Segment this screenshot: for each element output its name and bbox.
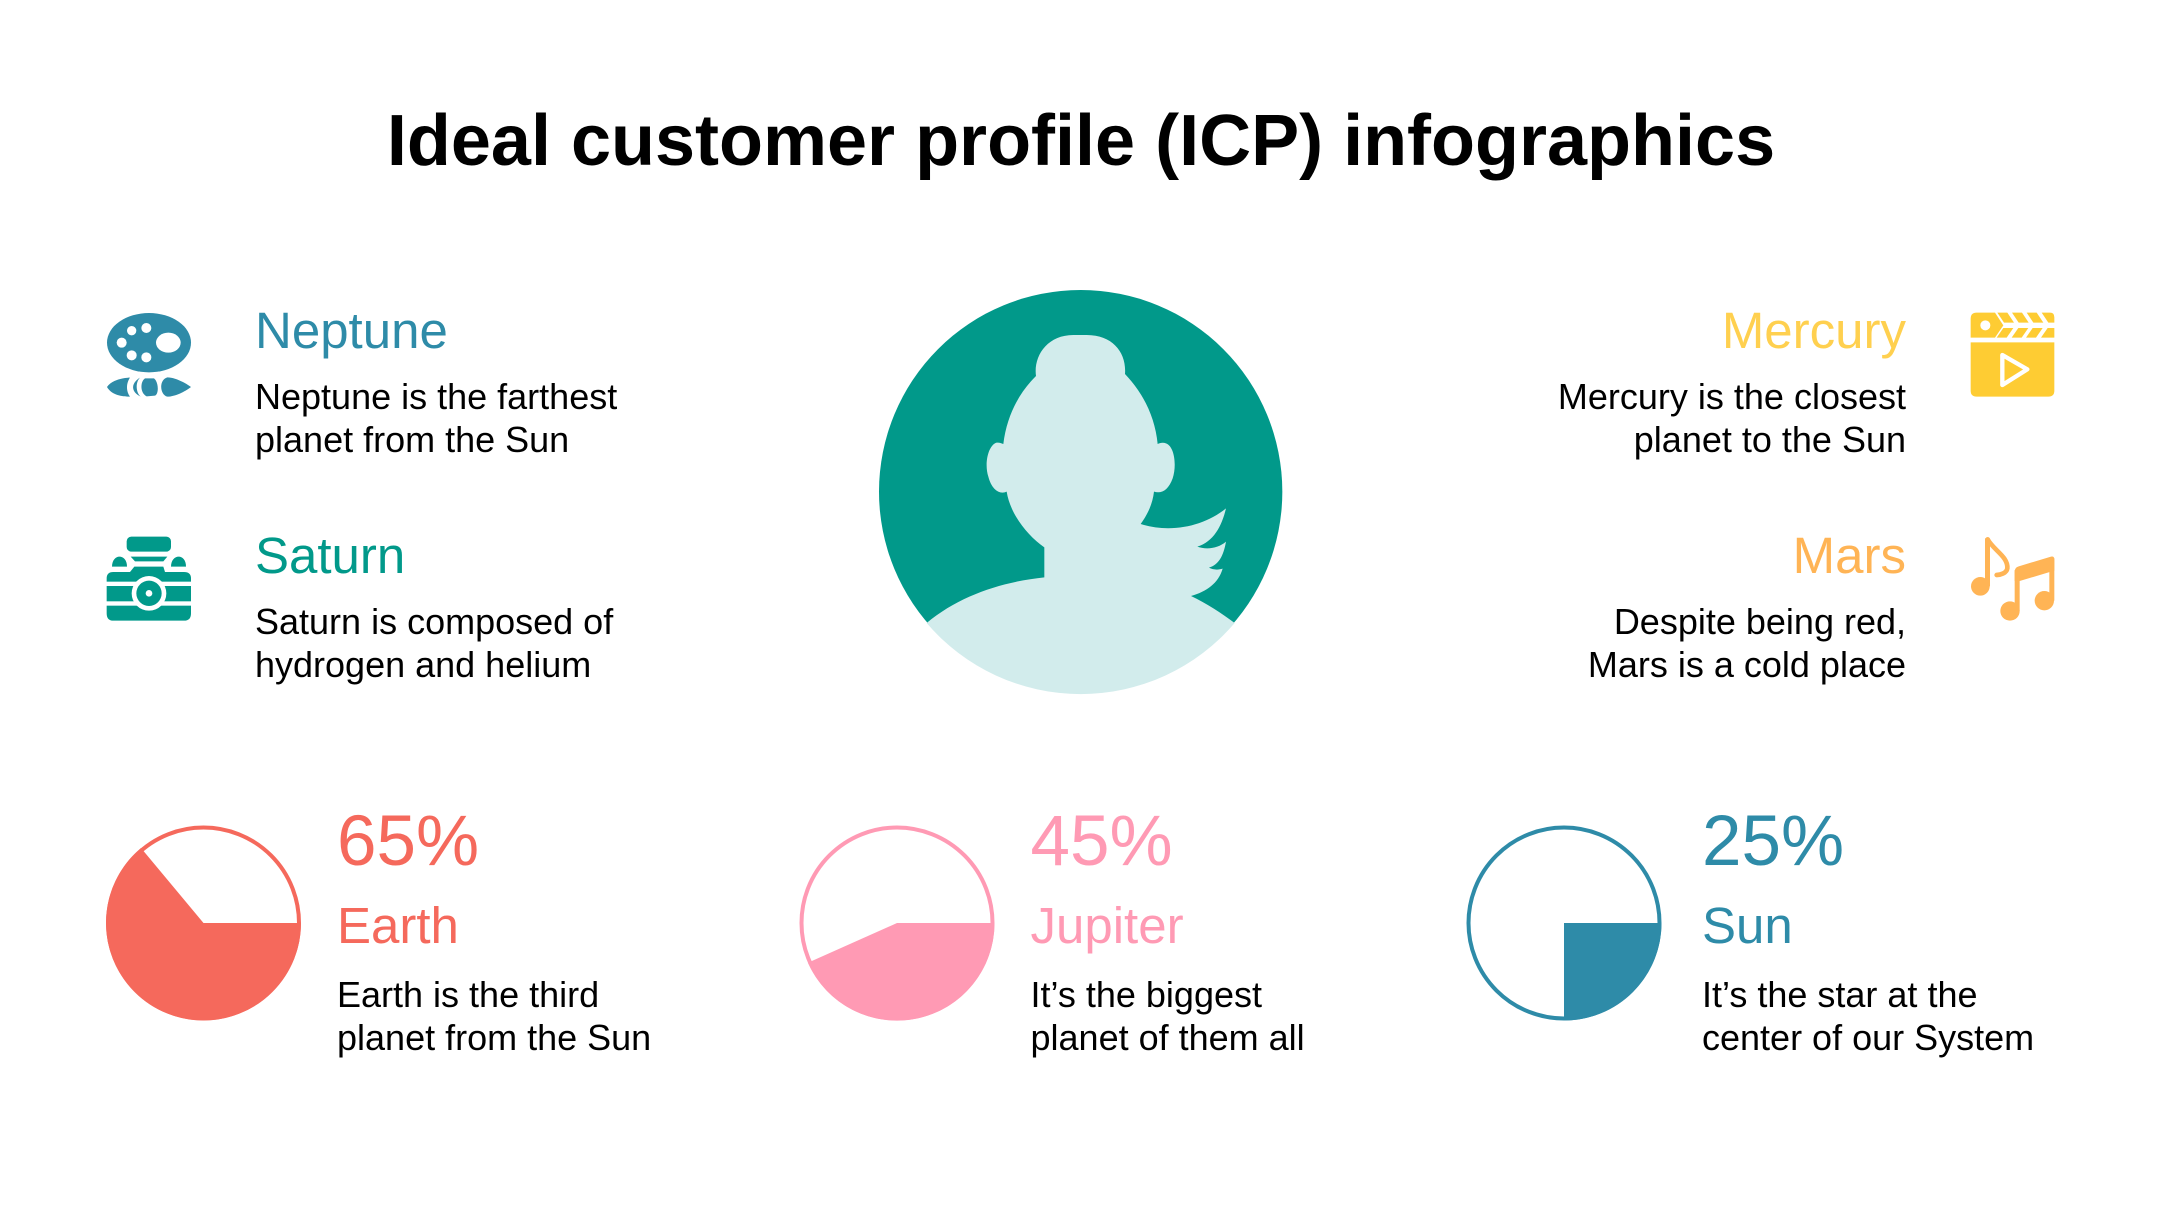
text: Jupiter description: It’s the biggest bbox=[1030, 974, 1262, 1015]
heading: Mercury: Mercury bbox=[1722, 302, 1906, 359]
text: Saturn description: hydrogen and helium bbox=[255, 644, 591, 685]
heading: Jupiter: Jupiter bbox=[1030, 897, 1184, 954]
text: Neptune description: Neptune is the farthest bbox=[255, 376, 617, 417]
value: 45%: 45% bbox=[1030, 802, 1173, 881]
text: Jupiter description: planet of them all bbox=[1030, 1017, 1305, 1058]
panel: Jupiter stat bbox=[802, 802, 1305, 1058]
text: Saturn description: Saturn is composed of bbox=[255, 601, 614, 642]
text: Mars description: Despite being red, bbox=[1614, 601, 1906, 642]
heading: Saturn: Saturn bbox=[255, 527, 405, 584]
text: Mercury description: planet to the Sun bbox=[1634, 419, 1906, 460]
heading: Neptune: Neptune bbox=[255, 302, 448, 359]
value: 65%: 65% bbox=[337, 802, 479, 881]
text: Sun description: It’s the star at the bbox=[1702, 974, 1977, 1015]
text: Sun description: center of our System bbox=[1702, 1017, 2034, 1058]
central avatar bbox=[879, 290, 1282, 694]
pie chart: 45% bbox=[802, 828, 995, 1021]
icon: video clapperboard bbox=[1971, 313, 2054, 397]
text: Earth description: Earth is the third bbox=[337, 974, 599, 1015]
panel: Mars bbox=[1588, 527, 2054, 685]
panel: Earth stat bbox=[106, 802, 651, 1058]
pie chart: 25% bbox=[1468, 828, 1662, 1020]
text: Mars description: Mars is a cold place bbox=[1588, 644, 1906, 685]
icon: music notes bbox=[1971, 538, 2054, 621]
text: Mercury description: Mercury is the closest bbox=[1558, 376, 1906, 417]
panel: Saturn bbox=[106, 527, 614, 685]
pie chart: 65% bbox=[106, 828, 301, 1020]
icon: palette and brush bbox=[107, 313, 191, 397]
text: Neptune description: planet from the Sun bbox=[255, 419, 569, 460]
text: Earth description: planet from the Sun bbox=[337, 1017, 651, 1058]
heading: Mars: Mars bbox=[1793, 527, 1906, 584]
icon: camera bbox=[106, 537, 192, 621]
heading: Sun: Sun bbox=[1702, 897, 1793, 954]
panel: Mercury bbox=[1558, 302, 2054, 460]
panel: Neptune bbox=[107, 302, 617, 460]
panel: Sun stat bbox=[1468, 802, 2034, 1058]
value: 25%: 25% bbox=[1702, 802, 1844, 881]
title: Ideal customer profile (ICP) infographics bbox=[387, 101, 1775, 181]
heading: Earth: Earth bbox=[337, 897, 459, 954]
